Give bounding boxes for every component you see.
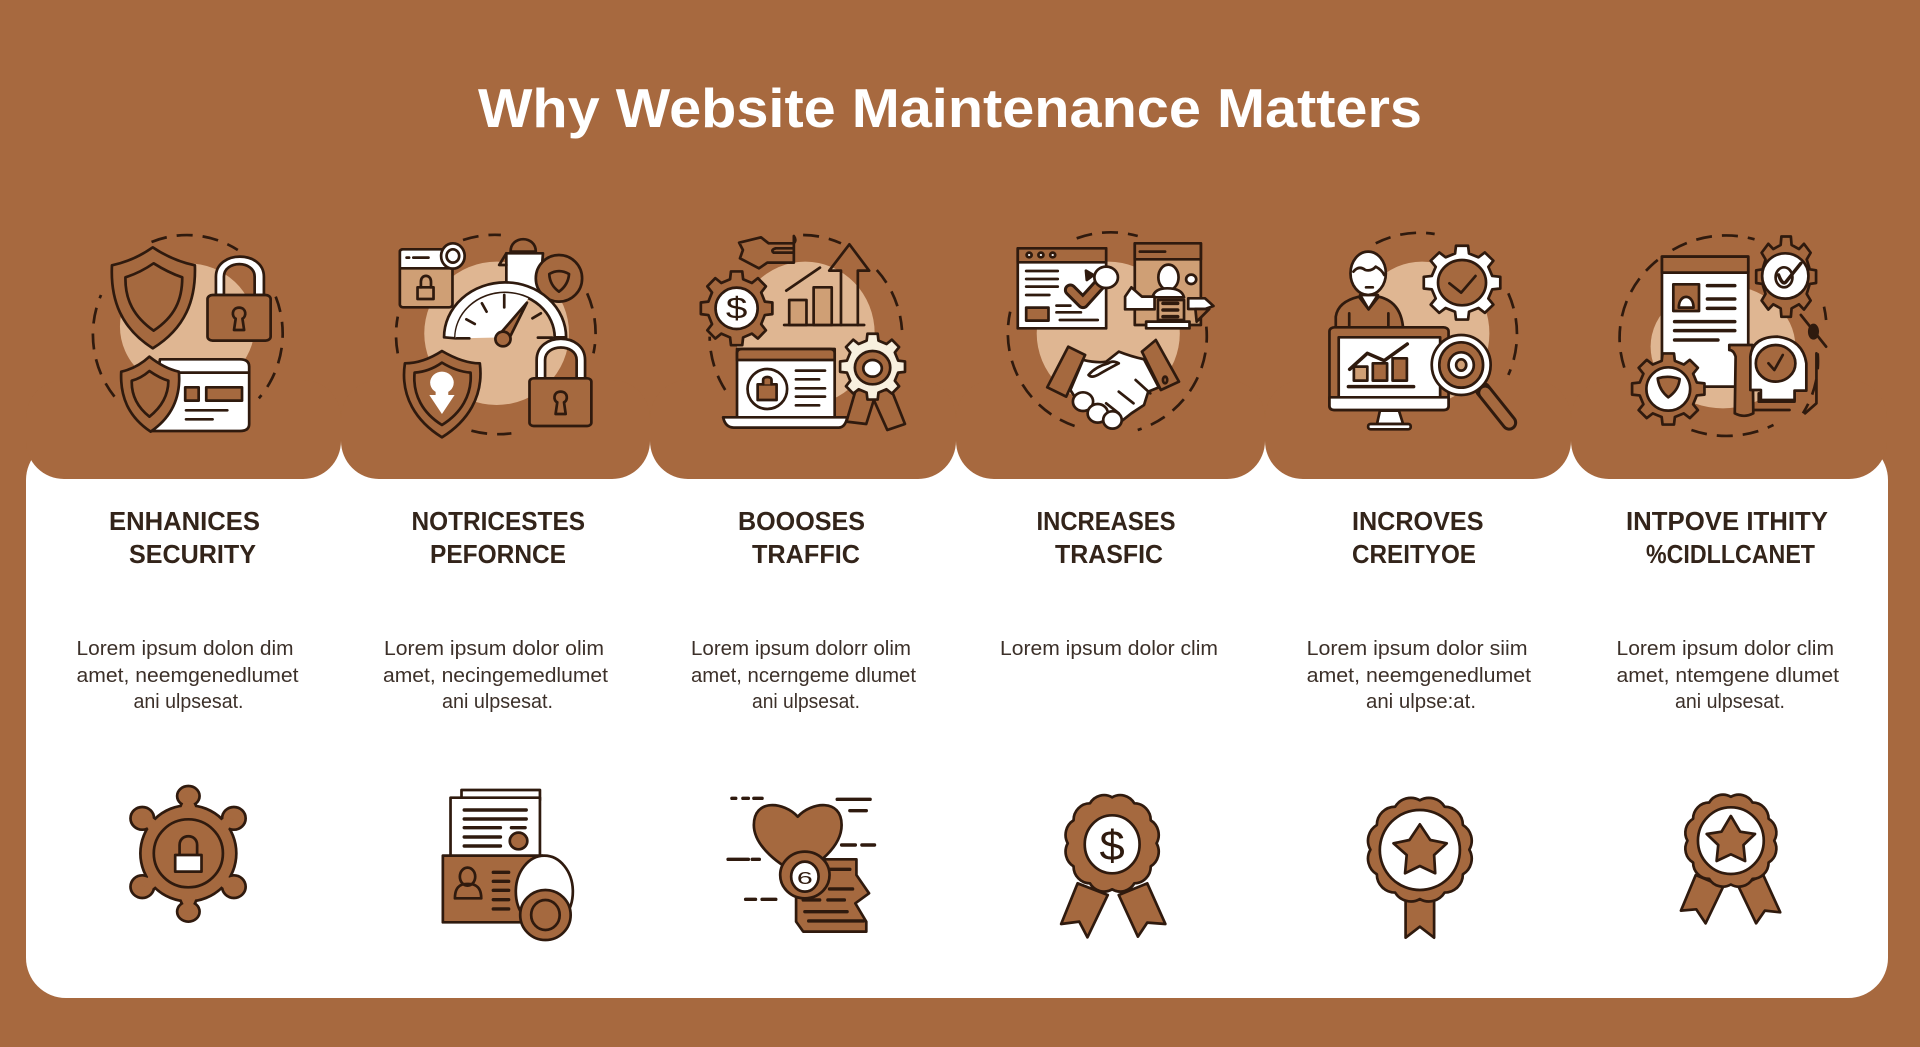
icon: lock wheel (132, 787, 244, 920)
column 6 text: amet, ntemgene dlumet (1616, 664, 1839, 687)
column 3 heading: TRAFFIC (752, 539, 860, 569)
column 5 text: Lorem ipsum dolor siim (1307, 637, 1528, 660)
column 5 heading (1352, 506, 1484, 569)
column 1 text: amet, neemgenedlumet (76, 664, 299, 687)
icon: star award with single ribbon (1368, 798, 1472, 938)
column 5 text: ani ulpse:at. (1366, 690, 1476, 713)
icon: person with monitor and magnifier (1329, 233, 1517, 429)
column 4 text: Lorem ipsum dolor clim (1000, 637, 1218, 660)
column 2 heading: NOTRICESTES (412, 506, 585, 536)
white content panel (26, 440, 1888, 998)
column 4 heading: INCREASES (1036, 506, 1176, 536)
column 1 text: Lorem ipsum dolon dim (76, 637, 294, 660)
column 4 heading: TRASFIC (1055, 539, 1163, 569)
icon: browser windows and handshake (1008, 232, 1213, 430)
column 5 text (1307, 637, 1531, 713)
title: Why Website Maintenance Matters (478, 77, 1422, 139)
column 1 text (76, 637, 299, 713)
column 3 heading (738, 506, 865, 569)
column 6 text: Lorem ipsum dolor clim (1616, 637, 1834, 660)
column 2 text (383, 637, 608, 713)
column 4 heading (1036, 506, 1176, 569)
column 1 text: ani ulpsesat. (134, 690, 244, 713)
column 2 heading: PEFORNCE (430, 539, 566, 569)
column 2 text: amet, necingemedlumet (383, 664, 608, 687)
column 5 text: amet, neemgenedlumet (1307, 664, 1531, 687)
column 1 heading (109, 506, 260, 569)
column 2 heading (412, 506, 585, 569)
column 3 text: Lorem ipsum dolorr olim (691, 637, 911, 660)
column 5 heading: INCROVES (1352, 506, 1484, 536)
column 1 heading: ENHANICES (109, 506, 260, 536)
column 5 heading: CREITYOE (1352, 539, 1476, 569)
column 6 text (1616, 637, 1839, 713)
icon: star award with two ribbons (1681, 795, 1780, 923)
icon: heart, coin and note (728, 798, 875, 932)
icon: security shields, padlock and card (93, 235, 283, 432)
column 3 text: ani ulpsesat. (752, 690, 860, 713)
column 6 heading: INTPOVE ITHITY (1626, 506, 1828, 536)
scalloped header tabs (26, 380, 1887, 479)
icon: profile document and card (443, 790, 573, 940)
column 2 text: ani ulpsesat. (442, 690, 553, 713)
column 3 text: amet, ncerngeme dlumet (691, 664, 916, 687)
icon: dollar award rosette (1061, 795, 1165, 937)
icon: growth chart, gears, laptop and award: $ (726, 291, 747, 326)
icon: document, gears and quality badge (1620, 235, 1826, 436)
column 6 heading: %CIDLLCANET (1646, 539, 1815, 569)
column 3 text (691, 637, 916, 713)
icon: performance gauge, shield and padlock (396, 235, 596, 437)
column 3 heading: BOOOSES (738, 506, 865, 536)
icon: dollar award rosette: $ (1100, 822, 1125, 870)
column 6 heading (1626, 506, 1828, 569)
column 2 text: Lorem ipsum dolor olim (384, 637, 604, 660)
icon: growth chart, gears, laptop and award (701, 235, 905, 430)
icon: heart, coin and note: 6 (797, 869, 813, 888)
column 6 text: ani ulpsesat. (1675, 690, 1785, 713)
column 1 heading: SECURITY (129, 539, 256, 569)
